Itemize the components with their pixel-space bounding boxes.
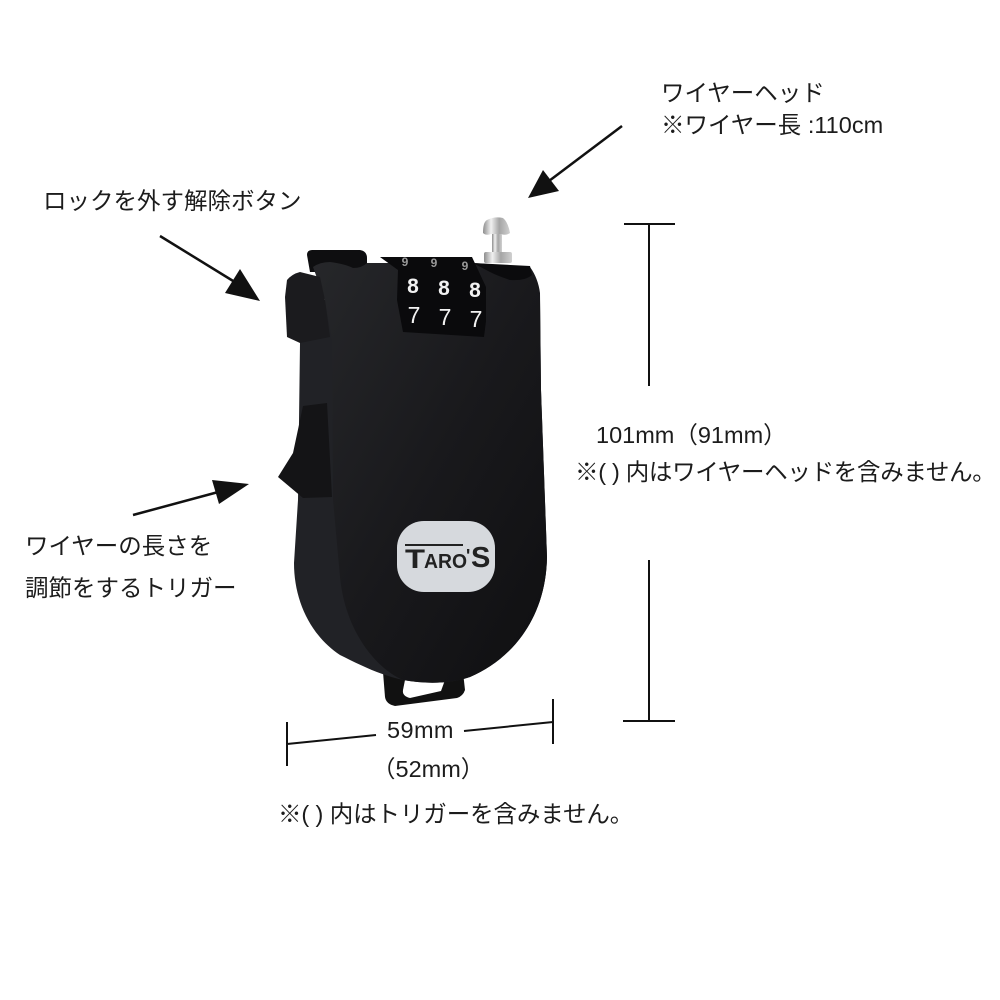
dimension: height [623,224,675,721]
label: wire head: ワイヤーヘッド [661,80,825,106]
dial wheels: 7 [439,304,451,330]
arrow: unlock button [160,236,260,301]
logo text: ' [466,546,470,566]
dial wheels: 8 [407,275,419,298]
dimension: width [287,699,553,766]
label: wire length trigger: 調節をするトリガー [25,575,236,601]
arrow: trigger [133,480,249,515]
main body [313,262,547,683]
label: width: 59mm [387,717,454,743]
product: combination cable lock [278,217,547,706]
dial wheels: 9 [462,259,469,273]
logo text: S [471,542,490,574]
label: wire head [661,80,883,138]
unlock button [285,272,330,343]
label: width without trigger: （52mm） [372,756,484,782]
logo text: T [405,544,426,574]
dial wheels: 9 [431,256,438,270]
trigger [278,403,332,498]
dial wheels: 7 [408,302,420,328]
dial wheels: 9 [402,255,409,269]
logo plate [397,521,495,592]
arrow: wire head [528,126,622,198]
rear tab [307,250,367,272]
label: wire head: ※ワイヤー長 :110cm [661,112,883,138]
dial wheels [380,255,486,337]
right shoulder recess [473,263,532,280]
dial wheels: 7 [470,306,482,332]
dial wheels: 8 [469,279,481,302]
rear shell [294,300,547,683]
label: unlock button: ロックを外す解除ボタン [43,188,302,214]
wire head [483,217,512,263]
label: wire length trigger [25,533,236,601]
note: height excludes wire head: ※( ) 内はワイヤーヘッドを含みません。 [575,459,996,485]
dial wheels: 8 [438,277,450,300]
label: wire length trigger: ワイヤーの長さを [25,533,212,559]
loop at bottom [383,672,465,706]
logo text: ARO [424,551,467,573]
note: width excludes trigger: ※( ) 内はトリガーを含みません。 [278,801,633,827]
label: height: 101mm（91mm） [596,422,787,448]
logo text [405,542,490,574]
